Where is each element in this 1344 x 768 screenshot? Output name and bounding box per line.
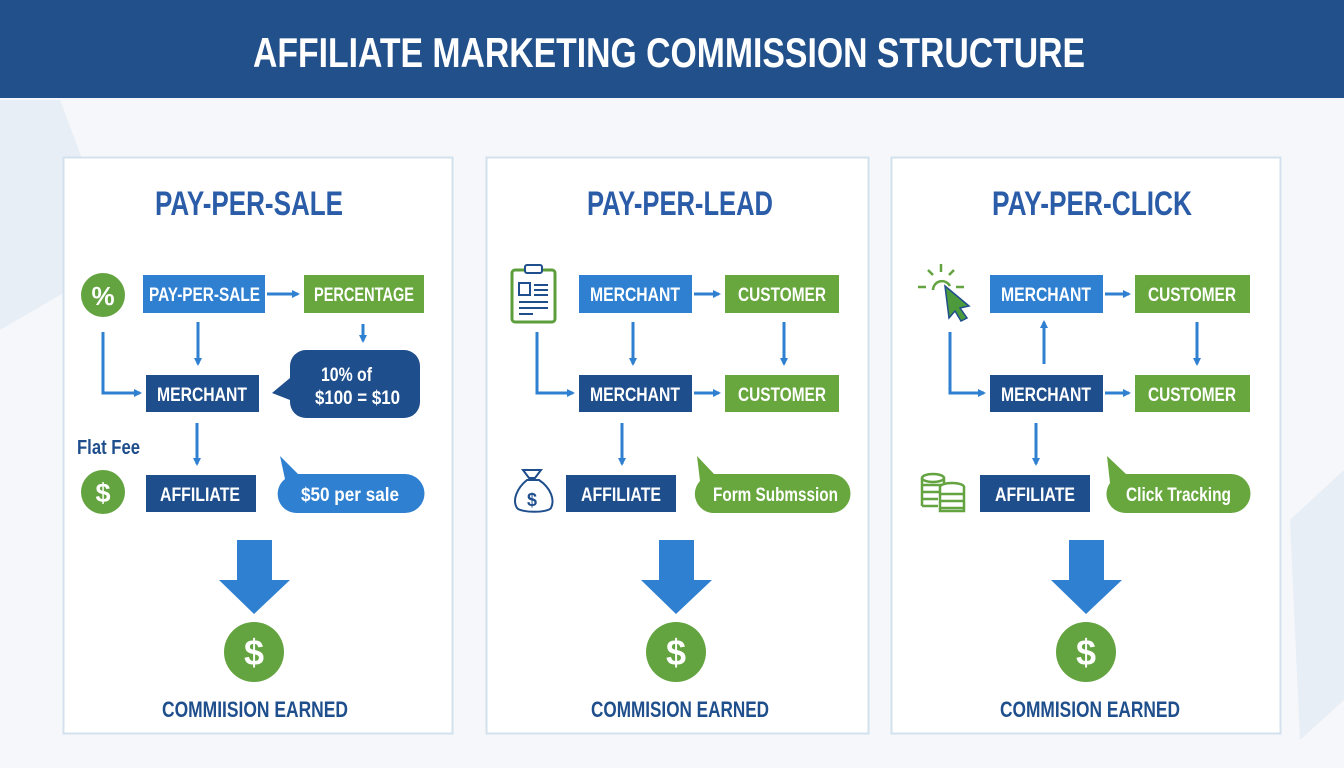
box: affiliate: AFFILIATE [581,485,661,506]
box: customer 2 [725,375,839,412]
callout: 10% of $100: $100 = $10 [315,388,400,409]
callout: click tracking: Click Tracking [1126,485,1231,506]
arrow: big down [1051,540,1122,614]
panel heading: PAY-PER-SALE [155,185,343,223]
icon: commission coin: $ [666,632,686,673]
panel: pay-per-lead [486,158,868,734]
callout: 10% of $100: 10% of [321,365,373,386]
box: customer: CUSTOMER [738,285,826,306]
box: merchant: MERCHANT [590,285,680,306]
panel heading: PAY-PER-LEAD [587,185,773,223]
panel heading: PAY-PER-CLICK [992,185,1192,223]
icon: clipboard [512,265,555,322]
box: merchant [990,275,1103,313]
callout: 10% of $100 [272,350,420,418]
panel: pay-per-click [892,158,1280,734]
header banner [0,0,1344,98]
label: flat fee: Flat Fee [77,437,140,459]
box: merchant dark: MERCHANT [1001,385,1091,406]
box: customer 2 [1135,375,1250,412]
icon: coin stacks [922,474,964,511]
box: customer [1135,275,1250,313]
icon: commission coin: $ [1076,632,1096,673]
arrow: big down [219,540,290,614]
box: affiliate [566,475,676,512]
callout: form submission [695,456,851,513]
callout: $50 per sale: $50 per sale [301,485,399,506]
box: pay-per-sale [143,275,265,313]
box: merchant [146,375,259,412]
callout: form submission: Form Submssion [713,485,838,506]
callout: click tracking [1106,456,1250,513]
arrow: big down [641,540,712,614]
box: customer [725,275,839,313]
box: merchant dark [990,375,1103,412]
box: customer 2: CUSTOMER [738,385,826,406]
label: commission earned: COMMISION EARNED [591,697,769,722]
title: AFFILIATE MARKETING COMMISSION STRUCTURE [253,29,1085,76]
box: customer: CUSTOMER [1148,285,1236,306]
icon: money bag [515,470,552,512]
label: commission earned: COMMISION EARNED [1000,697,1180,722]
box: merchant: MERCHANT [157,385,247,406]
box: merchant dark: MERCHANT [590,385,680,406]
icon: percent [81,273,125,317]
callout: $50 per sale [278,456,425,513]
icon: dollar: $ [95,478,111,508]
box: affiliate [146,475,256,512]
icon: commission coin [646,622,706,682]
box: pay-per-sale: PAY-PER-SALE [149,285,260,306]
icon: money bag: $ [527,490,537,510]
box: affiliate [980,475,1090,512]
icon: commission coin: $ [244,632,264,673]
icon: percent: % [91,281,115,311]
label: commission earned: COMMIISION EARNED [162,697,348,722]
box: merchant dark [579,375,692,412]
box: percentage: PERCENTAGE [314,285,414,306]
box: merchant: MERCHANT [1001,285,1091,306]
panel: pay-per-sale [64,158,452,734]
box: merchant [579,275,692,313]
icon: commission coin [1056,622,1116,682]
box: affiliate: AFFILIATE [995,485,1075,506]
box: percentage [304,275,424,313]
icon: dollar [81,470,125,514]
box: customer 2: CUSTOMER [1148,385,1236,406]
icon: cursor click [918,264,969,321]
icon: commission coin [224,622,284,682]
box: affiliate: AFFILIATE [160,485,240,506]
